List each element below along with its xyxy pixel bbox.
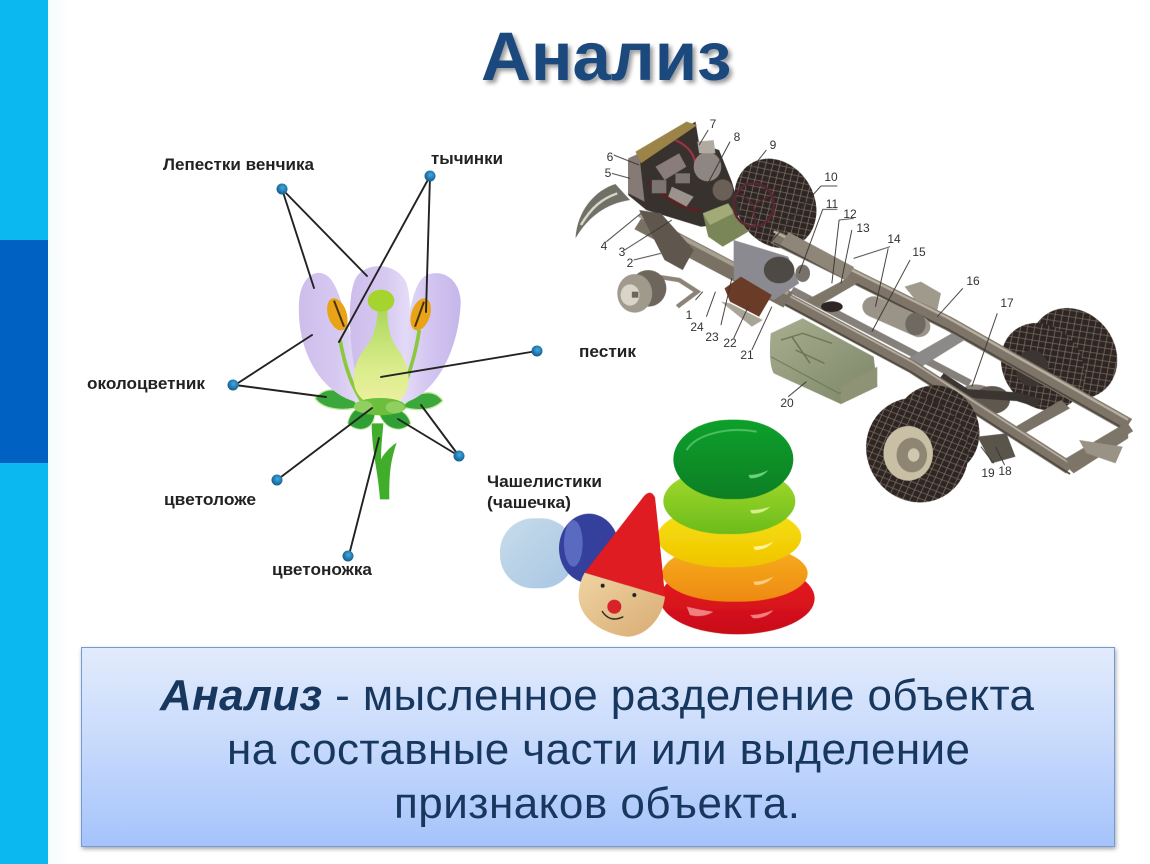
flower labels: тычинки <box>431 150 503 168</box>
sepals <box>315 390 360 409</box>
lower frame rail <box>785 298 1070 468</box>
rear near wheels <box>886 378 988 482</box>
part numbers <box>601 117 1014 480</box>
definition text: Анализ - мысленное разделение объекта <box>159 671 1035 720</box>
clown nose <box>607 600 621 614</box>
battery box <box>703 203 748 247</box>
leader lines <box>235 176 537 555</box>
definition text: на составные части или выделение <box>227 725 970 774</box>
part numbers: 15 <box>912 245 926 259</box>
part numbers: 6 <box>607 150 614 164</box>
brown box <box>725 277 772 317</box>
part numbers: 9 <box>770 138 777 152</box>
part numbers: 2 <box>627 256 634 270</box>
steering wheel <box>734 183 774 227</box>
flower labels: околоцветник <box>87 375 206 393</box>
propeller shaft <box>792 290 970 383</box>
part numbers: 17 <box>1000 296 1014 310</box>
rear cross member <box>1068 428 1128 473</box>
title: Анализ <box>481 18 731 95</box>
orange ring <box>662 545 808 602</box>
dark blue disc <box>559 514 619 583</box>
flower labels: Лепестки венчика <box>163 156 315 174</box>
fuel tank <box>770 318 877 404</box>
truck illustration <box>575 122 1133 511</box>
part numbers: 22 <box>723 336 737 350</box>
part numbers: 23 <box>705 330 719 344</box>
definition text: признаков объекта. <box>394 779 800 828</box>
part numbers: 20 <box>780 396 794 410</box>
part numbers: 19 <box>981 466 995 480</box>
part numbers: 11 <box>826 197 839 211</box>
part numbers: 7 <box>710 117 717 131</box>
part numbers: 14 <box>887 232 901 246</box>
yellow ring <box>657 507 801 567</box>
towing hitch <box>977 433 1015 463</box>
definition text <box>159 671 1035 828</box>
green ring <box>673 420 793 499</box>
clown hat <box>585 493 665 597</box>
leader lines <box>606 130 1005 465</box>
front suspension <box>639 210 694 270</box>
clown face <box>579 573 665 637</box>
part numbers: 16 <box>966 274 980 288</box>
upper frame rail <box>774 237 1128 425</box>
rear axle <box>963 384 1008 412</box>
bumper claw <box>575 184 630 238</box>
part numbers: 21 <box>740 348 754 362</box>
part numbers: 10 <box>824 170 838 184</box>
flower labels: (чашечка) <box>487 494 571 512</box>
flower diagram <box>87 150 637 579</box>
part numbers: 5 <box>605 166 612 180</box>
stamens <box>340 340 363 403</box>
cross bar and exhaust <box>806 277 857 307</box>
part numbers: 24 <box>690 320 704 334</box>
part numbers: 8 <box>734 130 741 144</box>
marker pins <box>228 170 542 562</box>
front hub <box>630 270 666 307</box>
pale blue disc <box>500 518 575 588</box>
red base ring <box>660 562 815 634</box>
flower labels: Чашелистики <box>487 473 602 491</box>
flower labels: цветоножка <box>272 561 373 579</box>
left sidebar stripe <box>0 0 70 864</box>
part numbers: 13 <box>856 221 870 235</box>
part numbers: 1 <box>686 308 693 322</box>
stem <box>372 423 397 499</box>
toy pyramid <box>500 420 815 637</box>
front wheel <box>720 147 831 259</box>
flower illustration <box>299 266 461 499</box>
part numbers: 4 <box>601 239 608 253</box>
muffler <box>874 307 919 327</box>
pistil <box>354 307 409 405</box>
petals <box>299 273 363 402</box>
part numbers: 12 <box>843 207 857 221</box>
radiator and engine mass <box>628 122 741 227</box>
centre cross member <box>908 333 965 368</box>
lime ring <box>663 468 795 534</box>
far rear wheels <box>1014 295 1133 412</box>
part numbers: 18 <box>998 464 1012 478</box>
flower labels: пестик <box>579 343 637 361</box>
gearbox <box>734 240 799 300</box>
definition box <box>82 648 1114 846</box>
part numbers: 3 <box>619 245 626 259</box>
flower labels <box>87 150 637 579</box>
front tube <box>639 222 788 300</box>
engine cylinders <box>694 152 721 181</box>
receptacle <box>354 398 406 415</box>
flower labels: цветоложе <box>164 491 256 509</box>
truck chassis diagram <box>575 117 1133 511</box>
